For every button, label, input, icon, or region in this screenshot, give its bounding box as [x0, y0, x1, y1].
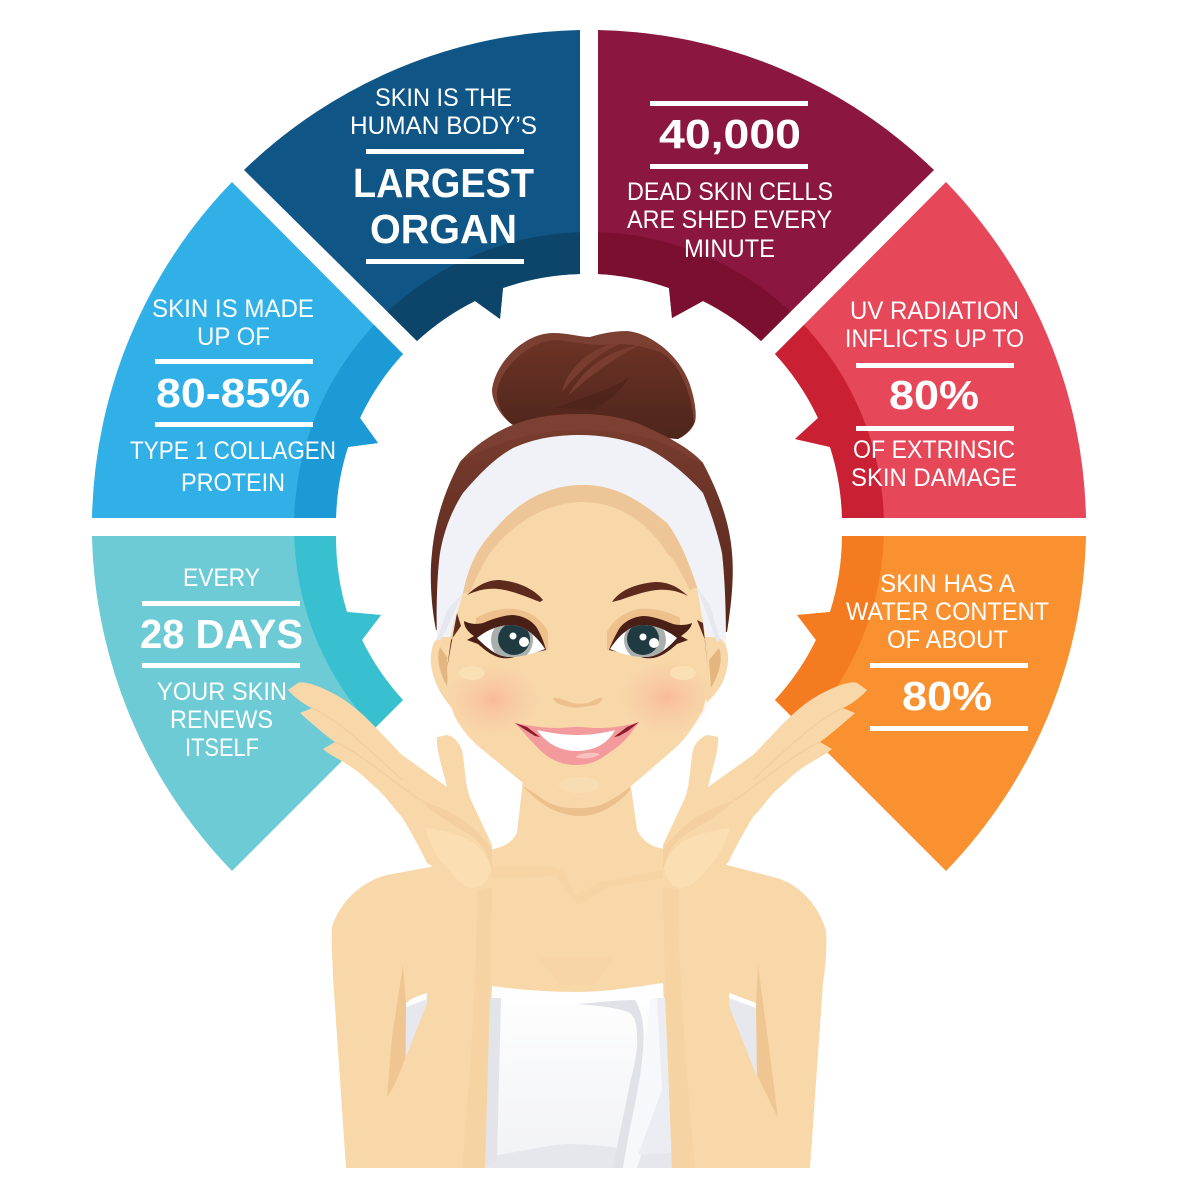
text: skin has a water content of about [846, 570, 1049, 654]
stat: 28 days: 28 DAYS [140, 611, 303, 657]
left eye [464, 615, 546, 661]
text: skin has a water content of about: SKIN HAS A [880, 570, 1015, 598]
underarm shadows [387, 965, 778, 1118]
headband [437, 435, 726, 645]
text: skin has a water content of about: WATER CONTENT [846, 598, 1049, 626]
stat: 80-85%: 80-85% [156, 370, 310, 416]
stat: largest organ [353, 160, 534, 252]
hair [431, 414, 733, 632]
text: of extrinsic skin damage [851, 436, 1017, 492]
stat: largest organ: ORGAN [370, 206, 517, 252]
ears [431, 637, 728, 708]
stat: 80% water: 80% [902, 673, 992, 719]
text: type 1 collagen protein: TYPE 1 COLLAGEN [130, 437, 336, 465]
text: skin has a water content of about: OF ABOUT [887, 626, 1008, 654]
text: skin is made up of: SKIN IS MADE [152, 295, 314, 323]
face [437, 485, 720, 808]
text: dead skin cells are shed every minute: MINUTE [684, 235, 775, 263]
right eye [609, 616, 692, 661]
mouth [515, 722, 639, 765]
right arm and hand [663, 682, 867, 1168]
left arm and hand [288, 682, 492, 1168]
hair bun [492, 331, 696, 439]
stat: 80% UV: 80% [889, 372, 979, 418]
text: of extrinsic skin damage: OF EXTRINSIC [853, 436, 1015, 464]
sideburns [447, 613, 708, 670]
text: UV radiation inflicts up to: UV RADIATION [850, 297, 1019, 325]
blush [447, 664, 539, 736]
text: your skin renews itself: RENEWS [170, 706, 273, 734]
panel: collagen [92, 182, 403, 518]
text: dead skin cells are shed every minute: DEAD SKIN CELLS [627, 178, 833, 206]
panel: dead skin cells [598, 30, 934, 341]
text: your skin renews itself: YOUR SKIN [157, 678, 287, 706]
panel: renewal [92, 536, 403, 871]
panel: largest organ [244, 30, 580, 341]
text: skin is the human body's: HUMAN BODY’S [350, 112, 537, 140]
towel [406, 983, 757, 1168]
text: skin is the human body's [350, 84, 537, 140]
text: type 1 collagen protein [130, 437, 336, 497]
text: every: EVERY [183, 564, 260, 592]
chin highlight [559, 777, 599, 793]
stat: largest organ: LARGEST [353, 160, 534, 206]
text: your skin renews itself [157, 678, 287, 762]
text: skin is made up of [152, 295, 314, 351]
cheek highlights [459, 666, 485, 680]
text: skin is made up of: UP OF [197, 323, 270, 351]
text: skin is the human body's: SKIN IS THE [375, 84, 512, 112]
text: dead skin cells are shed every minute [627, 178, 833, 263]
text: UV radiation inflicts up to [845, 297, 1024, 353]
text: type 1 collagen protein: PROTEIN [181, 469, 285, 497]
illustration: woman [288, 331, 867, 1168]
body and shoulders [332, 780, 826, 1168]
text: of extrinsic skin damage: SKIN DAMAGE [851, 464, 1017, 492]
forehead shadow [463, 485, 697, 593]
text: UV radiation inflicts up to: INFLICTS UP TO [845, 325, 1024, 353]
text: dead skin cells are shed every minute: ARE SHED EVERY [627, 206, 832, 234]
eyebrows [467, 580, 543, 602]
panel: water content [775, 536, 1086, 871]
text: your skin renews itself: ITSELF [185, 734, 259, 762]
nose [553, 698, 603, 708]
stat: 40,000: 40,000 [659, 111, 801, 157]
headband side edges [437, 587, 720, 642]
panel: UV radiation [775, 182, 1086, 518]
eye shadows [475, 609, 548, 650]
